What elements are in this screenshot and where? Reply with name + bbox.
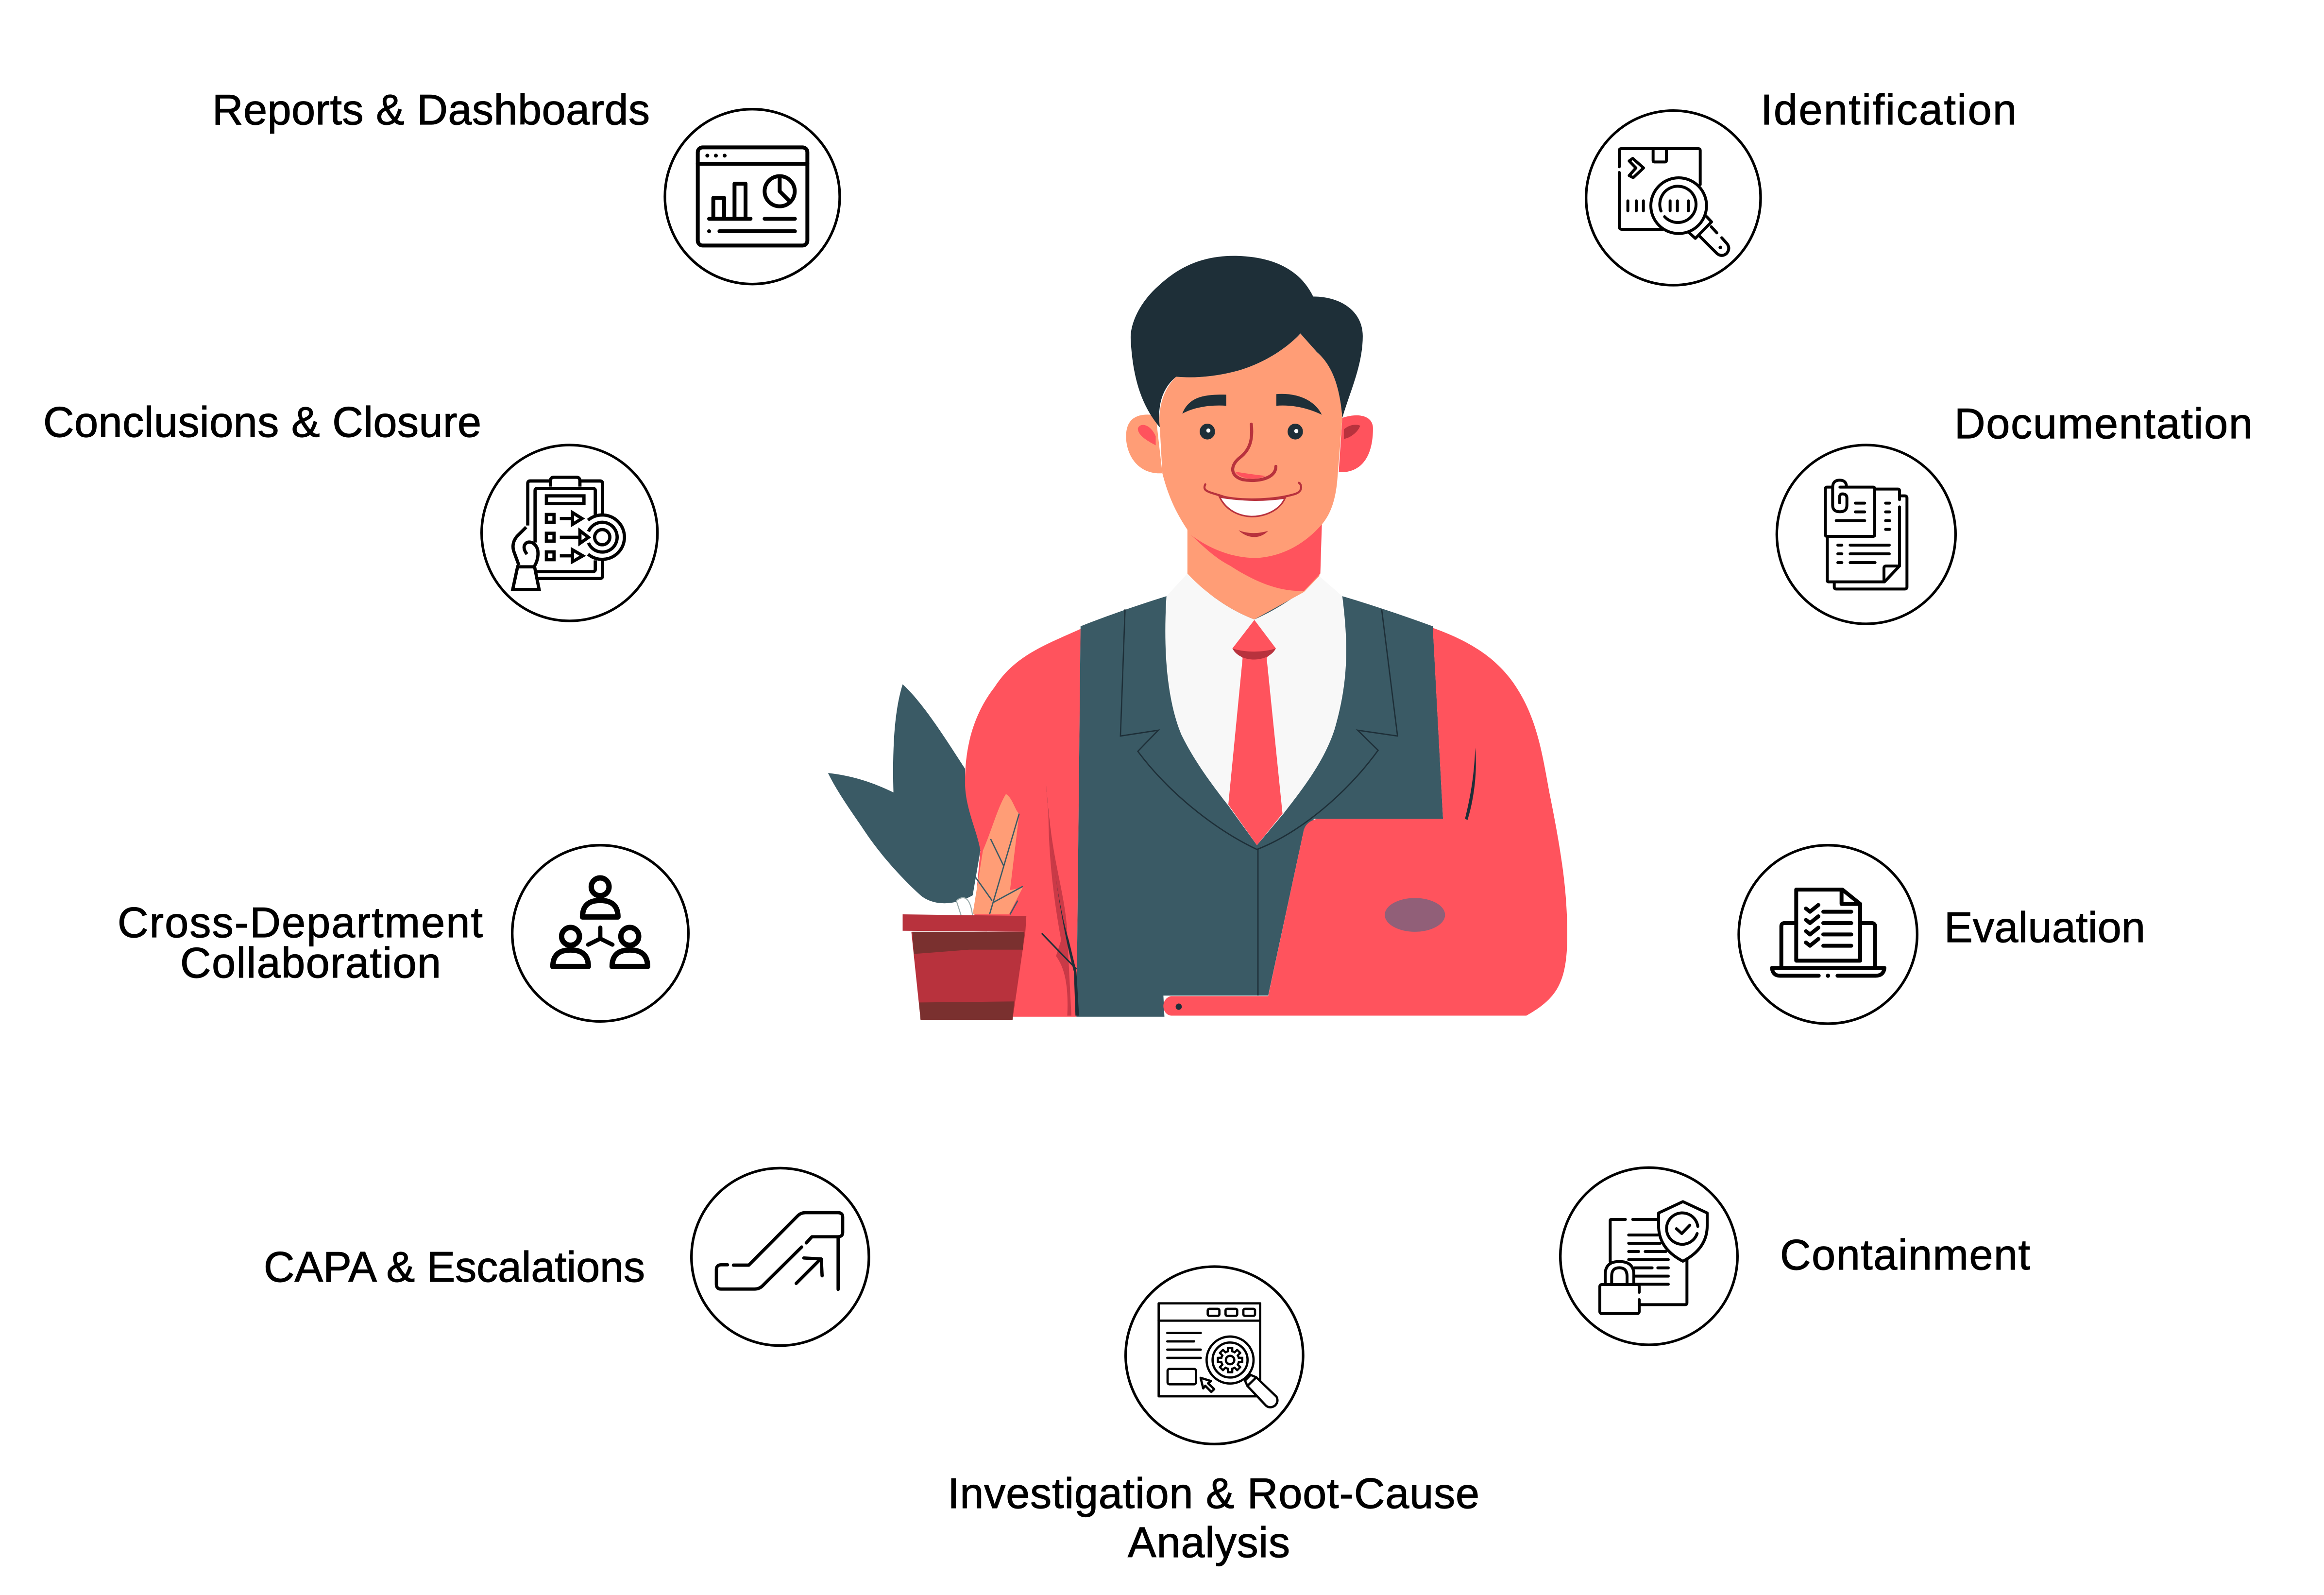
step: Containment	[1561, 1167, 2030, 1345]
label second line: Collaboration	[180, 939, 441, 987]
label: Conclusions & Closure	[43, 398, 481, 446]
right inner ear	[1344, 425, 1360, 439]
step: Identification	[1586, 86, 2017, 285]
left eyebrow	[1182, 394, 1226, 413]
teeth	[1220, 497, 1285, 516]
peach leaf veins	[975, 814, 1023, 914]
sleeve wrinkle	[1465, 748, 1476, 820]
lapels and seams	[1120, 609, 1397, 995]
pot body	[911, 932, 1025, 1019]
smile	[1204, 483, 1301, 499]
left inner ear	[1138, 425, 1156, 446]
right arm and laptop	[1163, 628, 1567, 1016]
right eyebrow	[1276, 394, 1322, 415]
hair	[1131, 256, 1363, 428]
pot upper band	[913, 932, 1024, 954]
icon: checklist on laptop	[1739, 845, 1917, 1024]
label: Investigation & Root-Cause	[948, 1469, 1479, 1517]
plant stem	[956, 898, 973, 916]
right eye glint	[1294, 429, 1298, 433]
label: Containment	[1780, 1231, 2030, 1279]
step: CAPA and Escalations	[264, 1168, 869, 1346]
label: Identification	[1761, 86, 2017, 134]
pot rim	[903, 914, 1026, 932]
left eye	[1200, 424, 1215, 440]
left ear	[1126, 414, 1162, 473]
nose	[1233, 424, 1276, 480]
right ear	[1339, 415, 1373, 472]
illustration: businessman with laptop and plant	[828, 256, 1567, 1020]
neck shadow	[1191, 524, 1322, 591]
lower lip	[1238, 530, 1268, 537]
sleeve shade	[1049, 808, 1071, 1016]
label: CAPA & Escalations	[264, 1243, 645, 1291]
shirt	[1165, 573, 1346, 845]
icon: escalator with arrow	[692, 1168, 869, 1346]
label: Evaluation	[1944, 903, 2145, 951]
label second line: Analysis	[1128, 1518, 1290, 1566]
icon: paper stack with clip	[1777, 445, 1955, 624]
icon: clipboard with target and hand	[482, 445, 658, 621]
left arm	[965, 629, 1081, 1017]
plant leaves	[828, 685, 981, 903]
laptop hinge dot	[1176, 1004, 1182, 1010]
icon: browser window with gear magnifier	[1126, 1267, 1303, 1444]
step: Documentation	[1777, 399, 2253, 624]
gear	[1217, 1347, 1243, 1373]
nose shade	[1235, 472, 1266, 479]
twig	[1042, 933, 1076, 969]
tie knot shadow	[1232, 649, 1276, 659]
step: Cross-Department Collaboration	[118, 845, 688, 1021]
label: Documentation	[1954, 399, 2253, 447]
vest	[1076, 596, 1443, 1017]
sleeve fold line	[1046, 782, 1079, 1016]
peach leaf	[973, 794, 1023, 914]
tie	[1228, 620, 1283, 845]
icon: document with shield and padlock	[1561, 1167, 1737, 1345]
left eye glint	[1206, 429, 1210, 433]
pot lower band	[919, 1001, 1014, 1020]
step: Investigation and Root-Cause Analysis	[948, 1267, 1479, 1566]
neck and face	[1159, 333, 1342, 619]
step: Reports and Dashboards	[212, 86, 840, 284]
step: Conclusions and Closure	[43, 398, 658, 621]
laptop logo	[1385, 898, 1445, 932]
icon: connected team	[512, 845, 688, 1021]
right eye	[1288, 424, 1303, 440]
icon: box under magnifier	[1586, 111, 1761, 285]
icon: dashboard window	[665, 109, 840, 284]
label: Reports & Dashboards	[212, 86, 650, 134]
label: Cross-Department	[118, 898, 483, 946]
step: Evaluation	[1739, 845, 2145, 1024]
